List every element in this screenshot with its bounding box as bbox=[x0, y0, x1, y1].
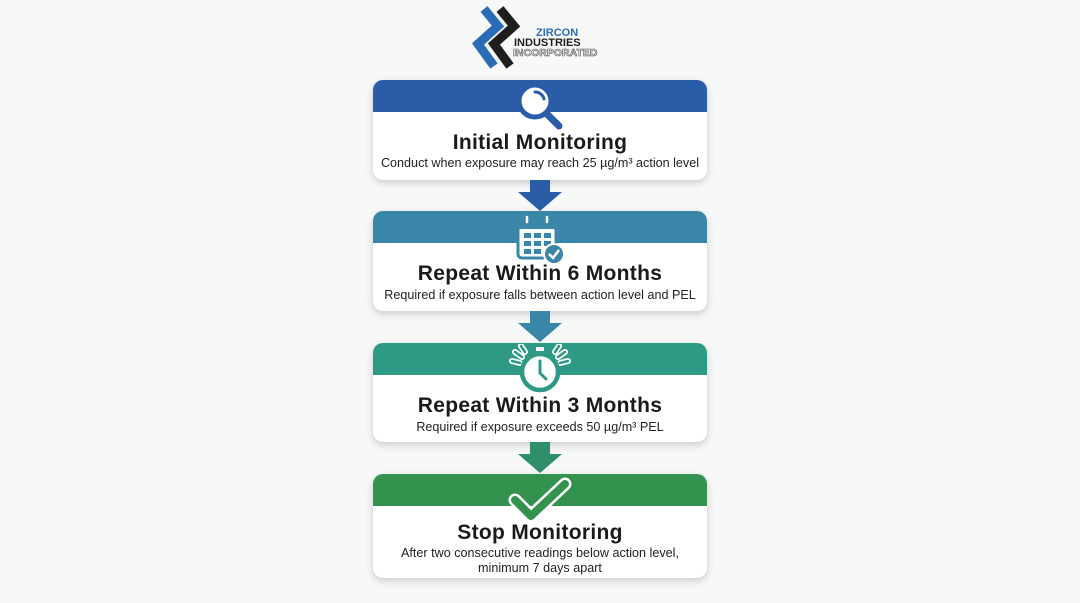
icon: calendar bbox=[516, 216, 563, 263]
card: repeat 3 months bbox=[373, 343, 707, 442]
card: stop monitoring bbox=[373, 474, 707, 578]
logo: ZIRCON bbox=[536, 27, 578, 39]
logo: INCORPORATED bbox=[513, 47, 598, 59]
text: After two consecutive readings below action level, bbox=[401, 546, 679, 560]
text: Required if exposure falls between action level and PEL bbox=[384, 288, 696, 302]
arrow bbox=[518, 311, 562, 342]
card: initial monitoring bbox=[373, 80, 707, 180]
text: Required if exposure exceeds 50 µg/m³ PEL bbox=[416, 420, 664, 434]
text: minimum 7 days apart bbox=[478, 561, 602, 575]
icon: magnifier bbox=[520, 88, 562, 130]
heading: Repeat Within 3 Months bbox=[418, 394, 662, 417]
logo bbox=[472, 6, 598, 69]
icon: stopwatch bbox=[509, 344, 571, 392]
arrow bbox=[518, 442, 562, 473]
card: repeat 6 months bbox=[373, 211, 707, 311]
logo: INDUSTRIES bbox=[514, 37, 581, 49]
heading: Stop Monitoring bbox=[457, 521, 623, 544]
text: Conduct when exposure may reach 25 µg/m³ action level bbox=[381, 156, 699, 170]
heading: Repeat Within 6 Months bbox=[418, 262, 662, 285]
heading: Initial Monitoring bbox=[453, 131, 627, 154]
arrow bbox=[518, 180, 562, 211]
icon: checkmark bbox=[508, 478, 572, 520]
text bbox=[401, 546, 679, 575]
